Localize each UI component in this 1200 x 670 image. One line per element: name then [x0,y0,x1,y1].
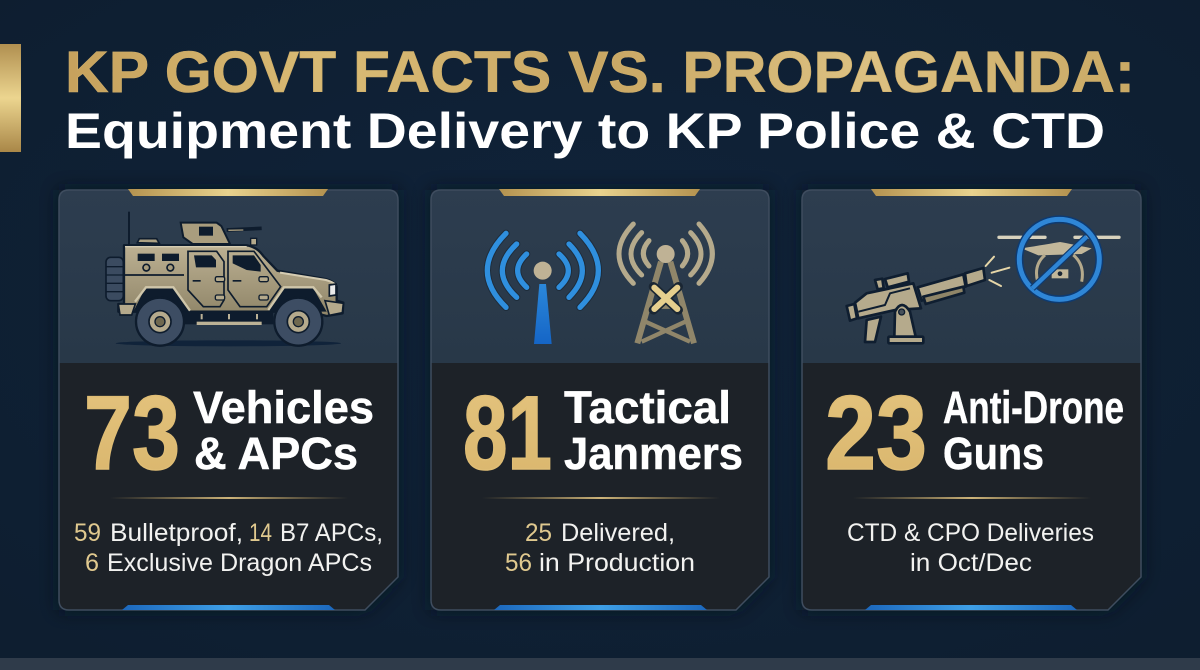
text: vehicle breakdown: Exclusive Dragon APCs [107,549,372,577]
panel: vehicles [59,189,398,610]
text: vehicle breakdown: B7 APCs, [280,519,383,547]
text: delivery note [847,519,1094,577]
text: vehicle breakdown: Bulletproof, [110,519,243,547]
text: vehicle breakdown [74,519,383,577]
stat: 23: 23 [825,375,927,492]
text: delivery note: CTD & CPO Deliveries [847,519,1094,547]
heading: tactical jammers [564,382,743,479]
title [65,40,1135,159]
panel: anti-drone guns [802,189,1141,610]
text: vehicle breakdown: 6 [85,549,99,577]
heading: anti-drone guns: Guns [943,428,1044,479]
text: jammer breakdown: 25 [525,519,552,547]
icon: blue signal antenna [487,233,598,344]
heading: vehicles and APCs: Vehicles [193,382,374,433]
text: delivery note: in Oct/Dec [910,549,1032,577]
heading: tactical jammers: Janmers [564,428,743,479]
text: jammer breakdown: in Production [539,549,695,577]
heading: anti-drone guns [943,382,1124,479]
panel: jammers [431,189,769,610]
icon: jammed tan tower [619,224,712,343]
gold accent bar [0,44,21,152]
heading: vehicles and APCs: & APCs [194,428,358,479]
heading: tactical jammers: Tactical [564,382,731,433]
icon: prohibited drone [999,219,1119,299]
icon: muzzle sparks [986,257,1009,286]
stat: 81: 81 [463,375,552,492]
stat: 73: 73 [84,375,180,492]
text: vehicle breakdown: 14 [249,519,272,547]
title line 1: KP GOVT FACTS VS. PROPAGANDA: [65,40,1135,105]
text: jammer breakdown: 56 [505,549,532,577]
title line 2: Equipment Delivery to KP Police & CTD [65,103,1105,159]
icon: anti-drone gun [847,268,985,343]
heading: vehicles and APCs [193,382,374,479]
text: jammer breakdown [505,519,695,577]
footer band [0,658,1200,670]
heading: anti-drone guns: Anti-Drone [943,382,1124,433]
text: vehicle breakdown: 59 [74,519,101,547]
text: jammer breakdown: Delivered, [561,519,675,547]
icon: armored vehicle [106,212,343,346]
